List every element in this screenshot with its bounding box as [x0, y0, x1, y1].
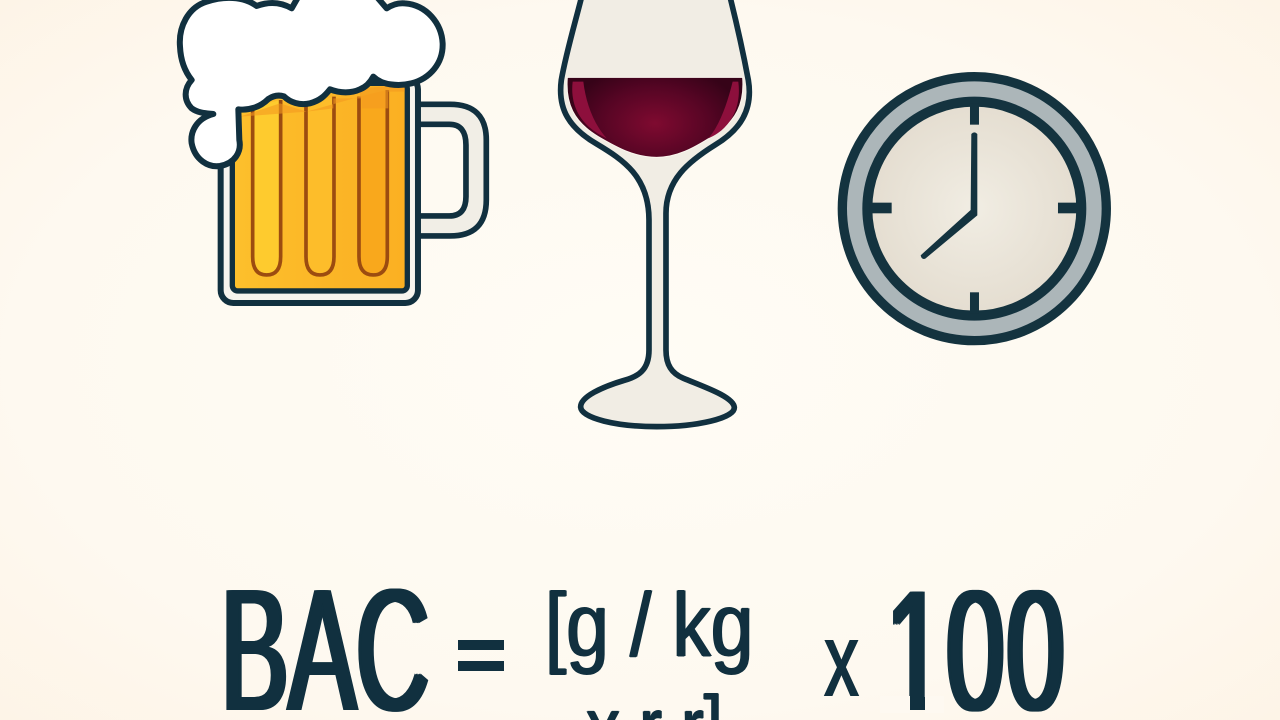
icon: beer mug	[180, 0, 486, 303]
clock outer ring	[842, 77, 1106, 341]
beer ridges	[253, 90, 387, 275]
clock face	[867, 102, 1081, 316]
clock ticks	[870, 103, 1080, 314]
foam shadow on beer	[240, 85, 405, 117]
beer fill	[232, 83, 407, 291]
icon: wine glass	[561, 0, 749, 427]
wine highlights	[572, 82, 607, 138]
mug glass	[221, 77, 418, 303]
formula: equals sign	[458, 640, 504, 671]
mug handle	[417, 104, 486, 236]
wine	[567, 77, 743, 157]
beer foam	[180, 0, 443, 166]
icon: clock	[842, 77, 1106, 341]
glass outline	[561, 0, 749, 427]
clock hands	[921, 132, 977, 259]
formula: multiply: x	[824, 601, 859, 719]
formula: numerator: [g / kg	[545, 576, 753, 676]
